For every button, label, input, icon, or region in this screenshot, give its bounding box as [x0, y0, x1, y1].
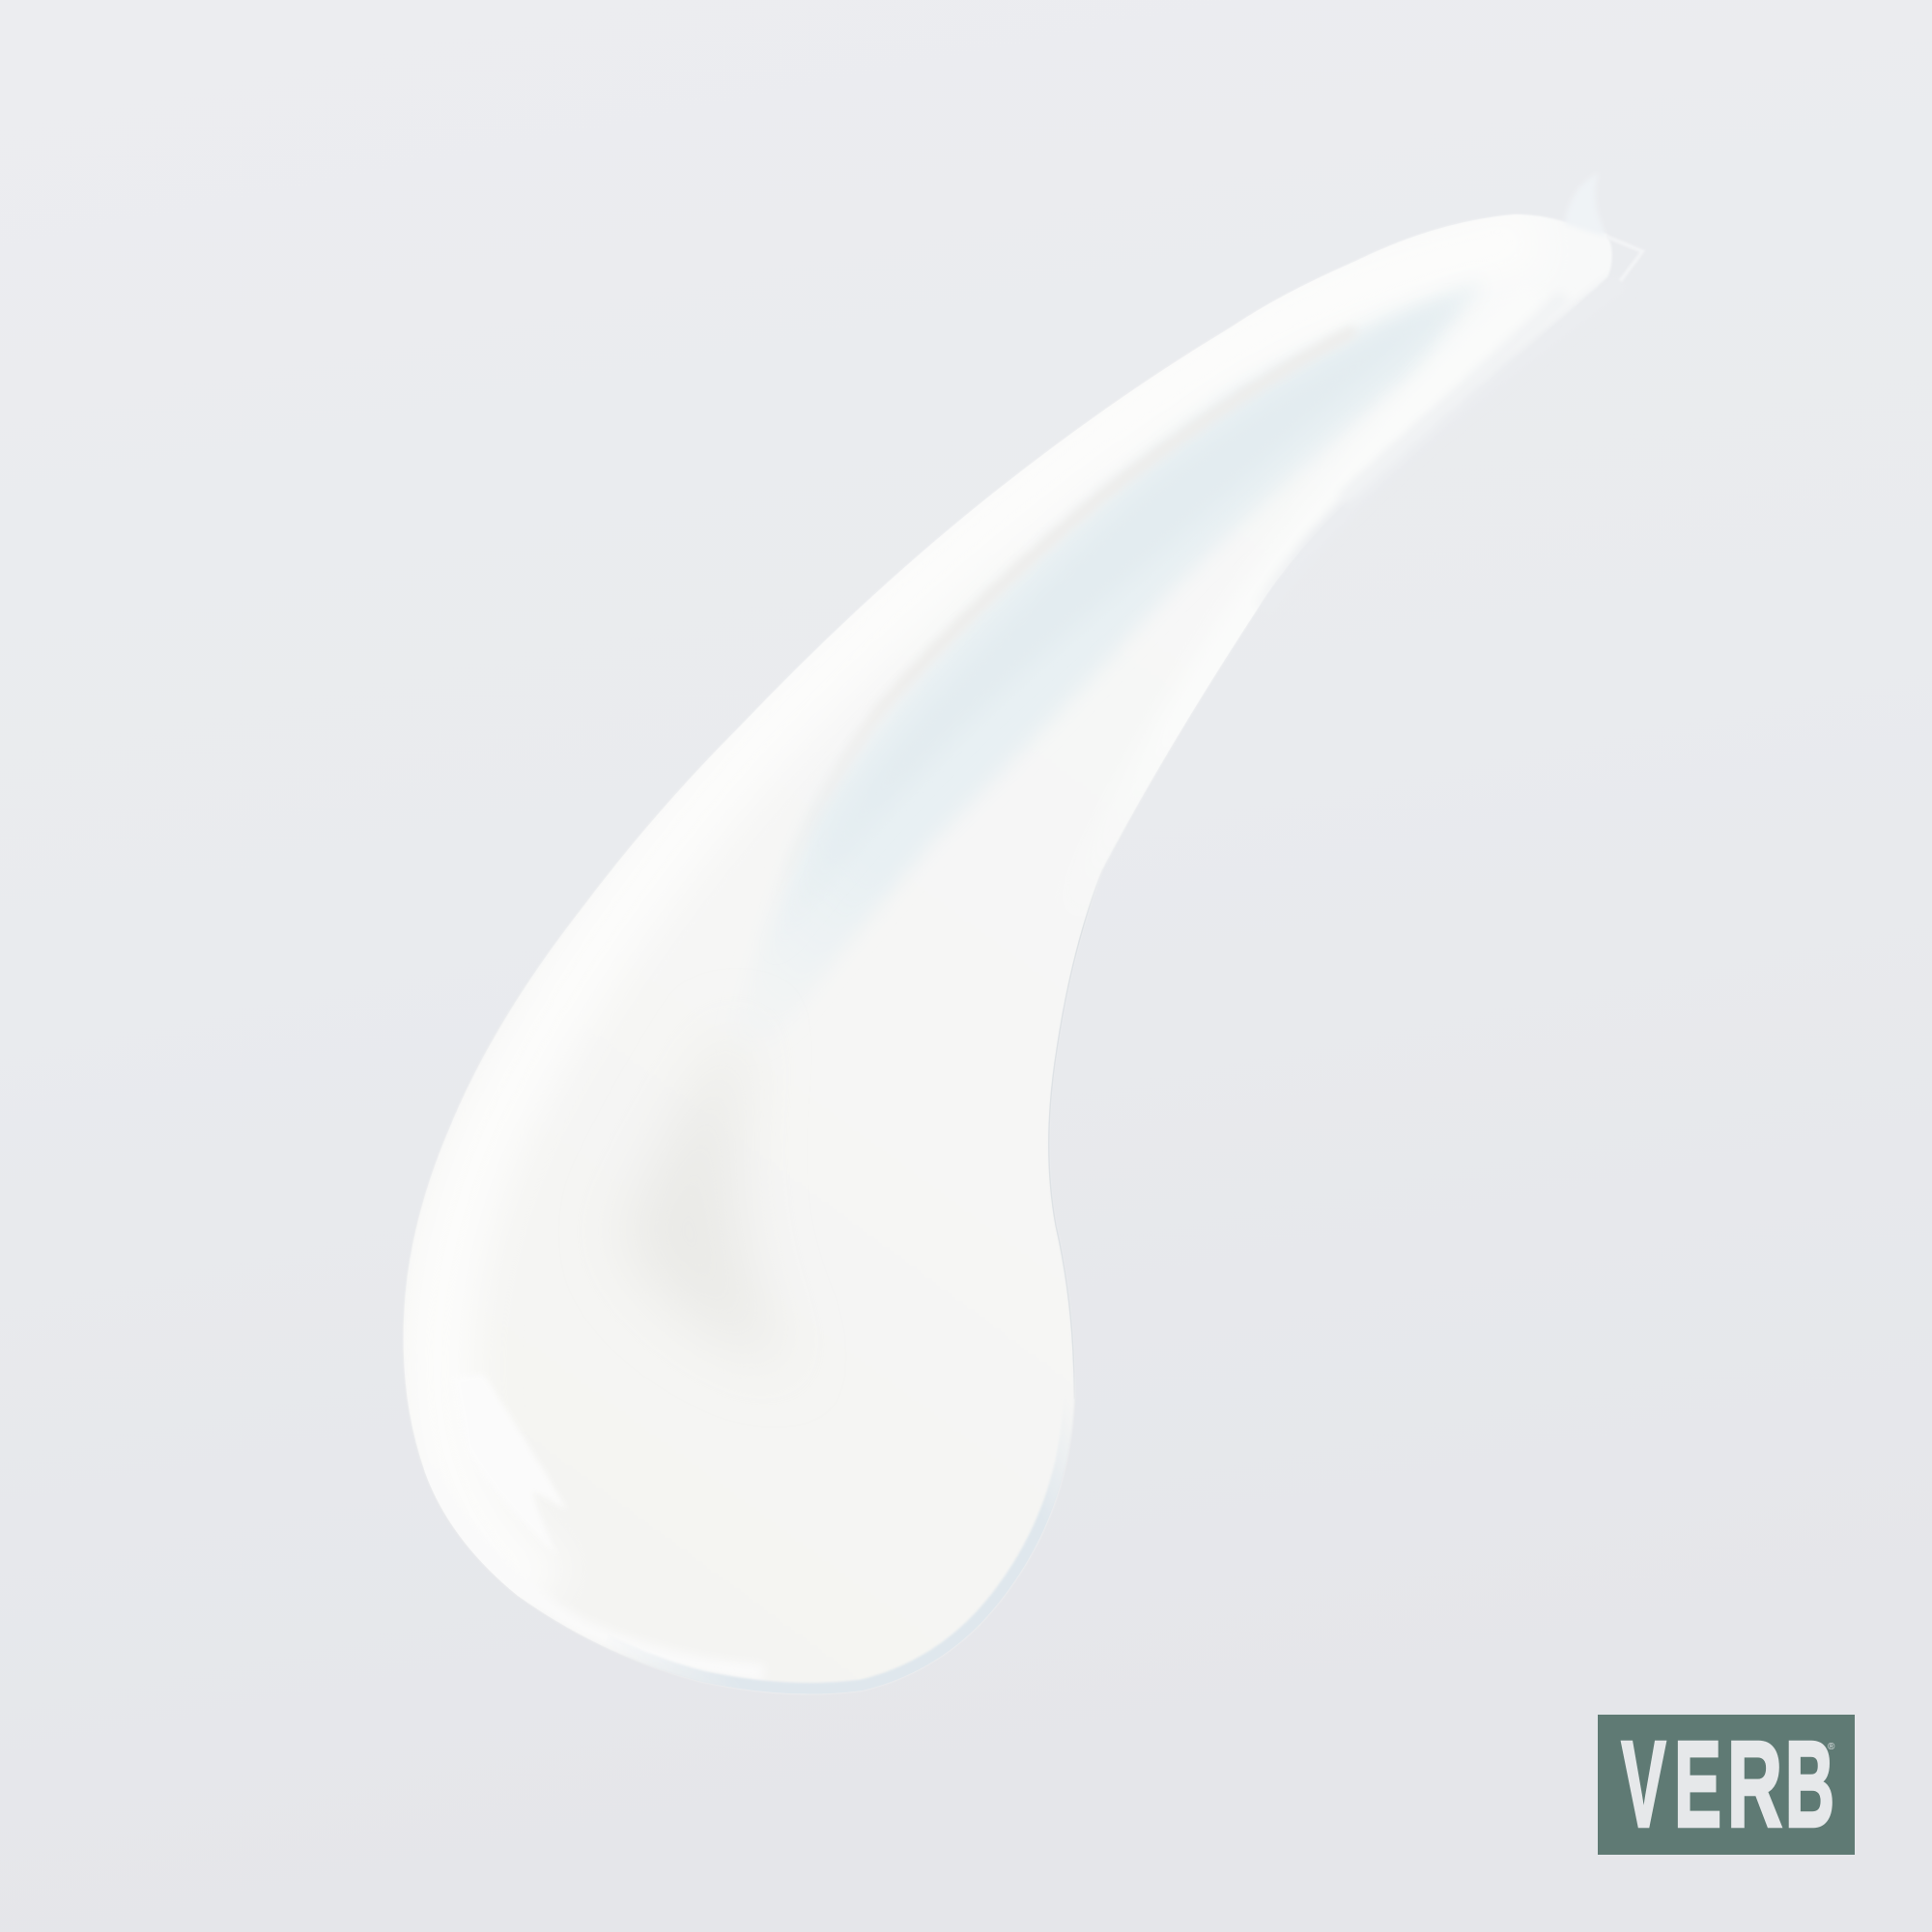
- logo wordmark: [1621, 1716, 1834, 1853]
- soft film edge fading into background: [1262, 281, 1623, 610]
- logo: VERB badge: [1598, 1715, 1855, 1855]
- lower rim band: [640, 1447, 1065, 1694]
- registered mark: ®: [1828, 1742, 1835, 1752]
- logo wordmark: E: [1674, 1716, 1721, 1853]
- swoosh shading: [425, 234, 1540, 1694]
- film smear beyond edge: [1343, 296, 1565, 499]
- specular highlight: [453, 1374, 567, 1555]
- bright right flank: [1182, 624, 1247, 728]
- logo wordmark: B: [1785, 1716, 1834, 1853]
- infographic canvas: [404, 214, 1855, 1855]
- crease shadow: [647, 1113, 741, 1312]
- cream swoosh: [404, 173, 1642, 1694]
- blue channel core: [770, 301, 1454, 961]
- cream ridge shadow: [895, 330, 1350, 694]
- tip nub: [1606, 237, 1642, 281]
- bright upper ridge: [407, 307, 1264, 1563]
- logo wordmark: V: [1621, 1716, 1665, 1853]
- fine right edge line: [1049, 868, 1103, 1399]
- tip spike: [1565, 173, 1606, 237]
- swoosh body: [404, 214, 1612, 1694]
- logo wordmark: R: [1727, 1716, 1782, 1853]
- blue channel: [788, 290, 1468, 947]
- logo background: [1598, 1715, 1855, 1855]
